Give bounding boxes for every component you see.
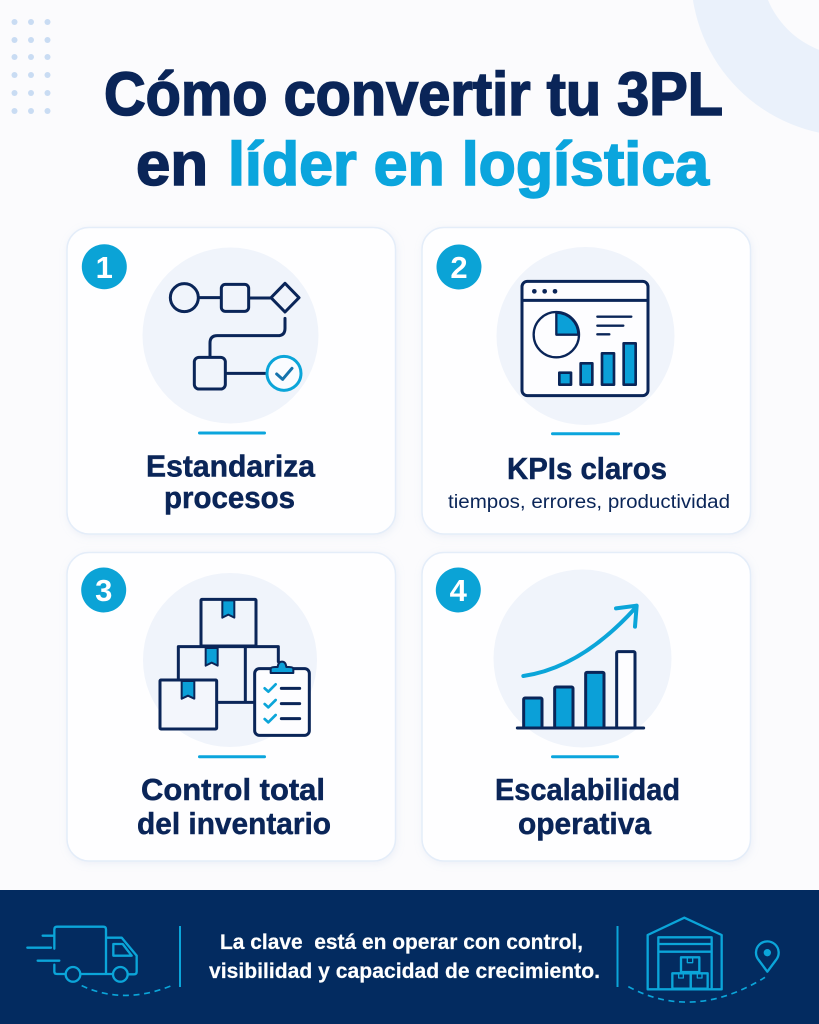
footer message: visibilidad y capacidad de crecimiento. (209, 960, 600, 983)
card 1 heading (146, 449, 316, 515)
badge 1 (82, 244, 127, 289)
card 4 heading: operativa (518, 806, 652, 841)
divider left (179, 926, 181, 987)
card 3 heading: del inventario (137, 806, 331, 841)
card 1 heading: Estandariza (146, 449, 316, 484)
accent line 4 (551, 755, 619, 758)
title: líder en logística (228, 130, 710, 198)
footer message: La clave está en operar con control, (220, 931, 583, 954)
badge 1: 1 (96, 250, 113, 285)
icon background circle 1 (142, 248, 318, 424)
card 3 heading: Control total (141, 772, 325, 807)
title (104, 60, 723, 198)
card 1 heading: procesos (164, 480, 295, 515)
icon: delivery truck (27, 927, 171, 995)
divider right (616, 926, 618, 987)
icon: boxes and clipboard (160, 599, 309, 735)
panel: 1 Estandariza procesos (67, 228, 396, 534)
card 2 subtitle: tiempos, errores, productividad (448, 492, 730, 513)
card 4 heading (495, 772, 680, 841)
footer band (0, 890, 819, 1024)
badge 3 (81, 568, 126, 612)
badge 4 (436, 568, 481, 612)
accent line 2 (551, 432, 620, 435)
footer message (209, 931, 600, 983)
icon: growth chart (517, 606, 644, 728)
icon: warehouse and location pin (628, 918, 779, 1002)
card 2 heading: KPIs claros (507, 451, 667, 486)
accent line 3 (198, 755, 266, 758)
panel: 2 KPIs claros (422, 228, 750, 534)
icon background circle 2 (496, 247, 674, 425)
badge 2 (436, 244, 482, 290)
icon: KPI dashboard (522, 281, 648, 396)
accent line 1 (198, 432, 266, 434)
badge 3: 3 (95, 573, 112, 608)
card 4 heading: Escalabilidad (495, 772, 680, 807)
icon: process flow (170, 283, 301, 390)
decorative dot grid (12, 19, 50, 114)
decorative ring top right (691, 0, 819, 136)
icon background circle 3 (143, 573, 317, 747)
panel: 3 Control total del inventario (67, 552, 396, 861)
card 3 heading (137, 772, 331, 841)
badge 2: 2 (450, 250, 468, 285)
title: en (136, 130, 208, 198)
title: Cómo convertir tu 3PL (104, 60, 723, 128)
panel: 4 Escalabilidad operativa (422, 552, 750, 861)
badge 4: 4 (450, 573, 468, 608)
icon background circle 4 (494, 570, 672, 748)
